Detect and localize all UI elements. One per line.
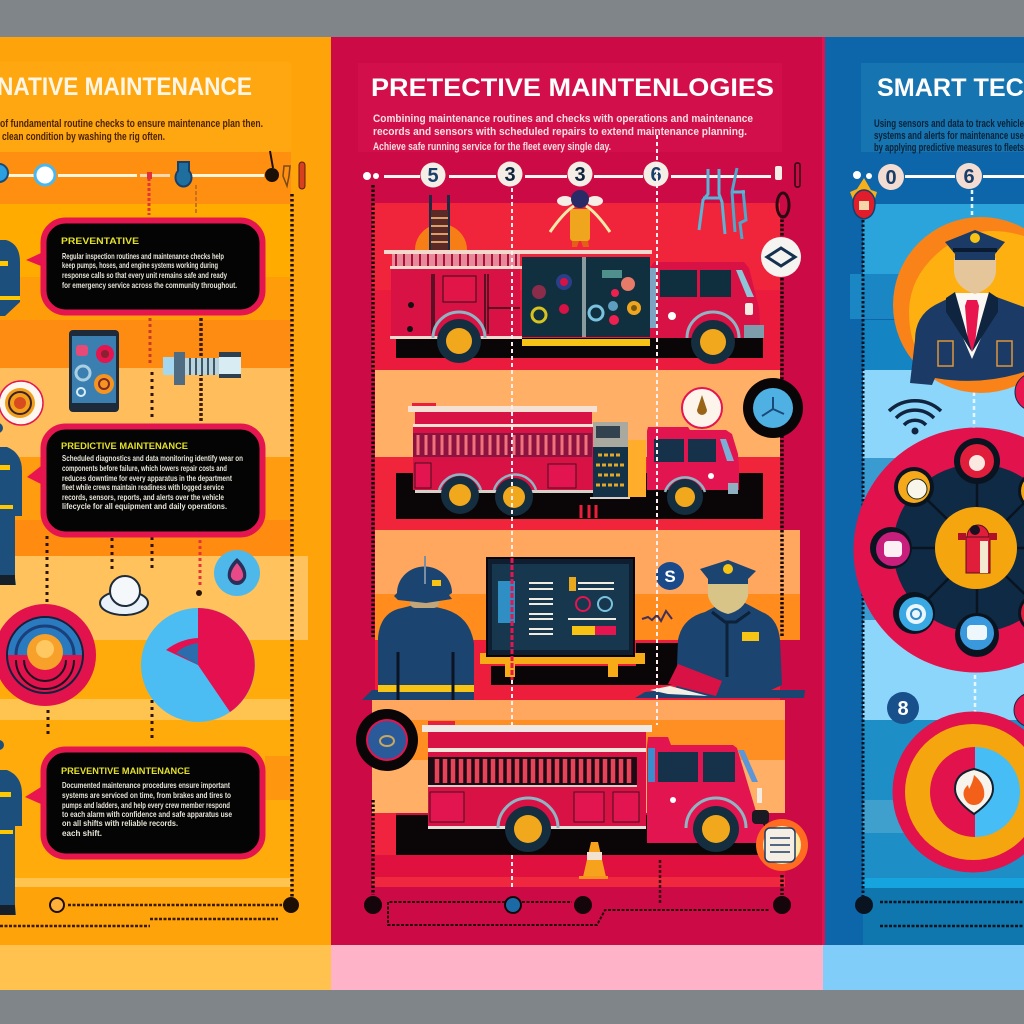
icon: hose coupling [163, 352, 241, 385]
callout 2 [27, 426, 262, 534]
callout 1: PREVENTATIVE [61, 236, 139, 246]
dotted connectors: red panel [373, 185, 782, 903]
radial gauge [0, 604, 96, 706]
badge: number 8: 8 [897, 698, 909, 720]
icon: firefighter gear [550, 190, 610, 247]
icon: ladder and sun [415, 195, 467, 250]
timeline: orange panel [0, 151, 305, 189]
timeline: blue panel [853, 163, 1024, 190]
badge: number 8 [887, 692, 919, 724]
callout 1 [26, 220, 262, 312]
icon: flame badge [214, 550, 260, 596]
icon: target badge [0, 381, 43, 425]
icon: s badge [656, 562, 684, 590]
timeline: red panel [363, 162, 800, 188]
icon: small waveform [642, 611, 672, 621]
callout 2: components before failure, which lowers repair costs and [62, 463, 227, 473]
icon: carabiner [777, 193, 789, 217]
callout 2: PREDICTIVE MAINTENANCE [61, 441, 188, 451]
timeline: red panel: 6 [650, 164, 662, 186]
icon: droplet badge [682, 388, 722, 428]
firefighter 2 [0, 423, 22, 585]
icon: traffic cone [579, 842, 608, 879]
panel dividers [331, 37, 825, 945]
icon: gauge badge [743, 378, 803, 438]
dotted connectors: blue panel [863, 190, 975, 900]
timeline: red panel: 3 [504, 164, 516, 186]
footer nodes: red panel [364, 896, 791, 925]
panel: predictive maintenance red [331, 37, 823, 990]
icon: badge right [761, 237, 801, 277]
firefighter 1 [0, 240, 20, 316]
callout 3: on all shifts with reliable records. [62, 818, 178, 828]
radial technology diagram [854, 428, 1024, 672]
callout 2: Scheduled diagnostics and data monitoring identify wear on [62, 453, 243, 463]
icon: gauge circle left [356, 709, 418, 771]
officer portrait [893, 217, 1024, 393]
intro text: red panel: Achieve safe running service for the fleet every single day. [373, 141, 611, 153]
callout 1: for emergency service across the community throughout. [62, 280, 237, 290]
icon: flame shield [850, 178, 877, 219]
intro text: orange panel: of fundamental routine checks to ensure maintenance plan then. [0, 118, 263, 130]
monitor dashboard [480, 558, 680, 685]
intro text: orange panel [0, 118, 263, 143]
intro text: red panel: records and sensors with scheduled repairs to extend maintenance planning. [373, 126, 747, 138]
callout 3: each shift. [62, 828, 102, 838]
intro text: red panel: Combining maintenance routines and checks with operations and maintenance [373, 113, 753, 125]
timeline: blue panel: 0 [885, 167, 897, 189]
header box: orange panel [0, 62, 291, 152]
firefighter at desk [362, 556, 474, 700]
callout 1: response calls so that every unit remains safe and ready [62, 270, 227, 280]
callout 3: Documented maintenance procedures ensure important [62, 780, 230, 790]
fire truck 3 [396, 721, 769, 855]
dotted white connectors: red panel [512, 135, 657, 887]
dotted connectors: orange panel [47, 178, 292, 905]
title: orange panel: NATIVE MAINTENANCE [0, 73, 252, 101]
header box: red panel [358, 63, 782, 152]
callout 1: Regular inspection routines and maintenance checks help [62, 251, 224, 261]
icon: s badge: S [664, 567, 676, 586]
callout 2: lifecycle for all equipment and daily operations. [62, 501, 227, 511]
firefighter 3 [0, 740, 22, 915]
panel: preventative maintenance orange [0, 37, 331, 990]
timeline: red panel: 5 [427, 165, 439, 187]
intro text: red panel [373, 113, 753, 153]
footer node: blue panel [855, 896, 1024, 926]
panel: smart technologies blue [823, 37, 1024, 990]
callout 3 [25, 750, 262, 856]
officer at desk [635, 560, 805, 698]
callout 2: fleet while crews maintain readiness with logged service [62, 482, 224, 492]
icon: phone [69, 330, 119, 412]
icon: side red circle bottom [1014, 693, 1024, 727]
callout 2: records, sensors, reports, and alerts over the vehicle [62, 492, 224, 502]
callout 3: PREVENTIVE MAINTENANCE [61, 766, 190, 776]
timeline: blue panel: 6 [963, 166, 975, 188]
callout 3: to each alarm with confidence and safe apparatus use [62, 809, 232, 819]
intro text: orange panel: clean condition by washing the rig often. [2, 131, 165, 143]
icon: cloud [100, 576, 148, 615]
fire truck 1 [384, 250, 764, 364]
icon: document badge [756, 819, 808, 871]
intro text: blue panel [874, 118, 1024, 154]
header box: blue panel [861, 63, 1024, 152]
fire truck 2 [396, 403, 763, 519]
pie chart [141, 608, 255, 722]
title: red panel: PRETECTIVE MAINTENLOGIES [371, 74, 774, 102]
timeline: red panel: 3 [574, 164, 586, 186]
icon: hand tools [699, 168, 746, 239]
callout 3: systems are serviced on time, from brakes and tires to [62, 790, 231, 800]
icon: wifi [889, 401, 941, 434]
footer nodes: orange panel [0, 897, 299, 926]
icon: side red circle top [1015, 373, 1024, 411]
callout 3: pumps and ladders, and help every crew member respond [62, 800, 230, 810]
callout 2: reduces downtime for every apparatus in the department [62, 473, 232, 483]
target donut with flame [892, 712, 1024, 872]
callout 1: keep pumps, hoses, and engine systems working during [62, 260, 218, 270]
